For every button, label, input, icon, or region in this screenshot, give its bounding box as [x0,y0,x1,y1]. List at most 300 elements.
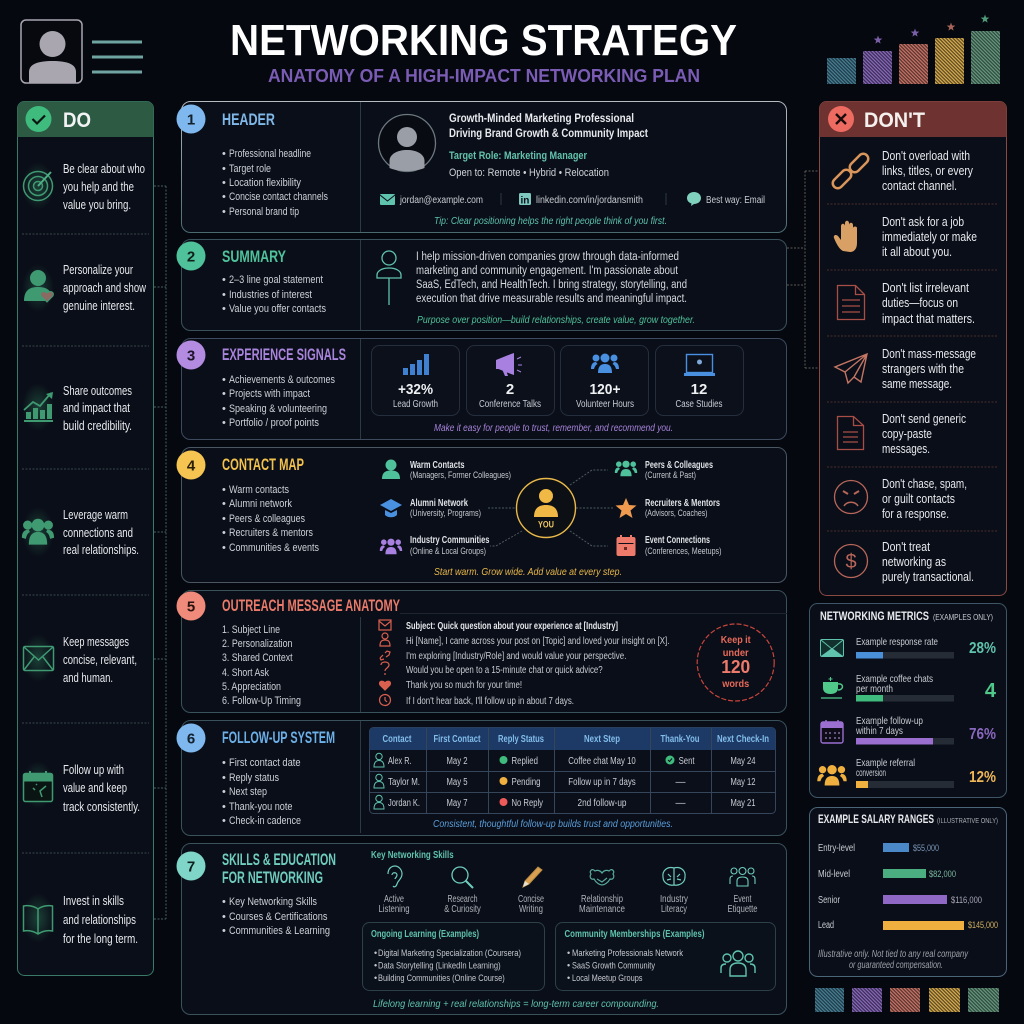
number badge 6: 6 [187,730,195,748]
number badge 5 [176,592,206,620]
summary checklist: • [222,274,226,286]
contact checklist: Recruiters & mentors [229,527,313,539]
panel: 6 follow-up system [176,720,786,836]
table header row [370,728,776,750]
salary bar: mid-level: $82,000 [929,869,956,879]
do item 4: people: Leverage warm [63,508,128,522]
table row: Jordan K.: May 7 [446,798,468,809]
heading: skills and education: SKILLS & EDUCATION [222,850,336,869]
skill: event etiquette: Event [734,894,752,905]
don't item 4: paper plane: strangers with the [882,362,964,376]
table header row: Contact [382,734,412,745]
table header row: Thank-You [660,734,700,745]
icon: person pin [377,251,401,305]
summary checklist: • [222,303,226,315]
key skills title: Key Networking Skills [371,850,454,861]
follow-up checklist: • [222,815,226,827]
stat card: volunteer hours: Volunteer Hours [576,399,634,410]
metric: referral conversion: 12% [969,769,996,786]
contact: alumni network: (University, Programs) [410,508,481,518]
do item 2: person with heart: approach and show [63,281,147,295]
contact: peers and colleagues: (Current & Past) [645,470,696,480]
metric: coffee chats: 4 [985,680,997,702]
outreach checklist: 3. Shared Context [222,652,292,664]
salary bar: lead: $145,000 [968,920,998,930]
heading: skills and education: FOR NETWORKING [222,868,323,887]
experience checklist: Projects with impact [229,388,310,400]
stat card: conference talks: 2 [506,381,514,398]
metric: follow-up: within 7 days [855,725,903,737]
contact: event connections: Event Connections [645,535,710,546]
don't item 4: paper plane: same message. [882,377,952,391]
table row: Taylor M.: May 12 [730,777,756,788]
profile headline: Target Role: Marketing Manager [449,150,588,162]
stat card: conference talks [466,346,554,416]
contact: event connections: (Conferences, Meetups) [645,546,722,556]
do item 5: envelope: Keep messages [63,635,129,649]
table row: Alex R. [374,753,756,767]
skill: active listening: Listening [378,904,410,915]
table header row: Next Step [584,734,620,745]
don't item 1: chain [831,149,974,193]
do item 3: chart [22,383,132,433]
skill: concise writing: Concise [518,894,544,905]
skills checklist: • [222,911,226,923]
summary paragraph: marketing and community engagement. I'm passionate about [416,265,679,277]
experience checklist: Portfolio / proof points [229,417,319,429]
number badge 6 [176,724,206,752]
skill: relationship maintenance [579,870,625,915]
skill: concise writing [518,867,544,915]
follow-up checklist: First contact date [229,757,301,769]
don't item 6: angry face: or guilt contacts [882,492,955,506]
contact: alumni network [380,498,481,518]
contact checklist [222,484,319,554]
heading: header: HEADER [222,110,275,129]
icon: x circle [828,106,854,132]
number badge 3 [176,340,206,370]
box: ongoing learning [362,922,544,990]
you node [516,478,576,538]
message lines: If I don't hear back, I'll follow up in about 7 days. [406,696,574,707]
metric: follow-up [821,715,996,744]
skill: relationship maintenance: Relationship [581,894,623,905]
salary bar: entry-level: Entry-level [818,843,855,854]
don't item 5: document: Don't send generic [882,412,966,426]
table row: Alex R.: Replied [512,756,538,767]
skills checklist [222,896,330,937]
follow-up checklist: • [222,757,226,769]
panel: do [18,102,154,976]
box: community memberships: • [567,948,570,958]
do item 4: people: real relationships. [63,543,139,557]
do item 1: target: Be clear about who [63,162,145,176]
header checklist: • [222,163,226,175]
callout: word limit: Keep it [721,634,751,646]
do item 5: envelope [22,634,137,685]
metric: referral conversion: Example referral [856,757,915,769]
don't heading: DON'T [864,109,925,132]
salary heading: EXAMPLE SALARY RANGES [818,812,934,826]
outreach checklist: 5. Appreciation [222,681,281,693]
callout: word limit [697,624,774,701]
skills checklist: • [222,896,226,908]
don't item 3: document: impact that matters. [882,312,975,326]
don't item 6: angry face [834,477,967,521]
skills tagline: Lifelong learning + real relationships = long-term career compounding. [373,998,659,1010]
don't item 2: hand: it all about you. [882,245,952,259]
salary bar: lead [818,920,998,931]
contact checklist: Alumni network [229,498,292,510]
don't item 3: document [838,281,975,326]
panel: 2 summary [176,240,786,330]
outreach checklist: 4. Short Ask [222,667,269,679]
table row: Taylor M.: Follow up in 7 days [568,777,636,788]
skill: research and curiosity: Research [448,894,478,905]
do item 7: open book: and relationships [63,913,136,927]
don't item 1: chain: links, titles, or every [882,164,974,178]
do item 6: calendar: track consistently. [63,800,140,814]
metric: coffee chats [821,673,997,702]
header checklist: • [222,191,226,203]
do item 6: calendar: Follow up with [63,763,124,777]
follow-up checklist: Thank-you note [229,801,292,813]
skill: concise writing: Writing [519,904,543,915]
table row: Alex R.: May 2 [446,756,468,767]
icon: rising bars with stars [827,14,1000,84]
you node: YOU [538,520,554,530]
contact checklist: • [222,542,226,554]
icon: community group [721,951,755,976]
salary disclaimer: or guaranteed compensation. [849,960,943,971]
header checklist: Target role [229,163,271,175]
subtitle: ANATOMY OF A HIGH-IMPACT NETWORKING PLAN [268,66,700,86]
do item 4: people: connections and [63,526,133,540]
contact: warm contacts: (Managers, Former Colleagues) [410,470,511,480]
salary bar: senior [818,895,982,906]
contact channels: jordan@example.com [399,195,483,206]
don't item 6: angry face: Don't chase, spam, [882,477,967,491]
box: ongoing learning: Building Communities (Online Course) [378,973,505,983]
metric: follow-up: Example follow-up [856,715,923,727]
profile headline: Growth-Minded Marketing Professional [449,113,634,125]
table header row: Next Check-In [717,734,769,745]
table row: Alex R.: May 24 [730,756,756,767]
salary bar: senior: $116,000 [951,895,982,905]
do item 1: target [22,162,145,212]
don't item 7: dollar coin: $ [845,551,857,573]
follow-up table [370,728,776,814]
don't item 2: hand [834,215,977,259]
table row: Jordan K.: 2nd follow-up [578,798,627,809]
table row: Alex R.: Sent [679,756,695,767]
box: community memberships: • [567,973,570,983]
do item 1: target: you help and the [63,180,134,194]
box: ongoing learning: • [374,948,377,958]
contact checklist: • [222,484,226,496]
follow-up checklist: Check-in cadence [229,815,301,827]
do item 1: target: value you bring. [63,198,131,212]
don't item 5: document: copy-paste [882,427,932,441]
skill: industry literacy: Industry [660,894,688,905]
do heading: DO [63,109,91,132]
number badge 4: 4 [187,458,196,474]
follow-up tagline: Consistent, thoughtful follow-up builds trust and opportunities. [433,818,673,830]
do item 2: person with heart: Personalize your [63,263,133,277]
box: community memberships: SaaS Growth Community [572,960,655,970]
summary checklist: 2–3 line goal statement [229,274,323,286]
skill: research and curiosity: & Curiosity [444,904,481,915]
salary bar: senior: Senior [818,895,841,906]
number badge 4 [176,450,206,480]
skills checklist: Courses & Certifications [229,911,328,923]
stat card: case studies: Case Studies [676,399,722,410]
salary bar: entry-level: $55,000 [913,843,939,853]
experience checklist: • [222,374,226,386]
follow-up checklist: • [222,801,226,813]
contact: alumni network: Alumni Network [410,498,468,509]
do item 5: envelope: concise, relevant, [63,653,137,667]
table row: Alex R.: Coffee chat May 10 [568,756,636,767]
callout: word limit: 120 [721,657,750,677]
icon: check circle [26,106,52,132]
do item 5: envelope: and human. [63,671,113,685]
table row: Jordan K.: No Reply [512,798,543,809]
table row: Taylor M.: Pending [512,777,540,788]
callout: word limit: under [723,647,749,659]
do item 3: chart: and impact that [63,401,130,415]
don't item 7: dollar coin: networking as [882,555,946,569]
number badge 1: 1 [187,112,195,128]
follow-up checklist [222,757,301,827]
contact channels [380,192,765,206]
follow-up checklist: • [222,772,226,784]
don't item 3: document: duties—focus on [882,296,958,310]
panel: don't [820,102,1006,596]
box: ongoing learning: Ongoing Learning (Examples) [371,929,479,940]
do item 7: open book: Invest in skills [63,894,124,908]
summary checklist: Value you offer contacts [229,303,326,315]
metric: response rate [820,636,996,658]
stat card: case studies: 12 [691,381,707,398]
skill: research and curiosity [444,867,481,915]
stat card: lead growth: +32% [398,381,433,398]
outreach checklist: 2. Personalization [222,638,292,650]
follow-up checklist: Reply status [229,772,279,784]
do item 6: calendar: value and keep [63,781,127,795]
heading: follow-up system: FOLLOW-UP SYSTEM [222,728,335,747]
skill: event etiquette [728,868,758,915]
summary paragraph: SaaS, EdTech, and HealthTech. I bring strategy, storytelling, and [416,279,687,291]
salary bar: entry-level [818,843,939,854]
stat card: volunteer hours [560,346,648,416]
message lines: Subject: Quick question about your experience at [Industry] [406,621,618,632]
summary checklist: Industries of interest [229,289,312,301]
outreach checklist: 1. Subject Line [222,624,280,636]
callout: word limit: words [721,678,749,690]
connectors: do column to sections [154,186,166,919]
do item 7: open book: for the long term. [63,932,138,946]
contact channels: Best way: Email [706,195,765,206]
skill: active listening: Active [384,894,404,905]
salary disclaimer: Illustrative only. Not tied to any real company [818,949,969,960]
number badge 5: 5 [187,598,195,616]
stat card: volunteer hours: 120+ [590,381,621,398]
contact checklist: • [222,498,226,510]
box: ongoing learning: Data Storytelling (LinkedIn Learning) [378,960,501,970]
contact checklist: Communities & events [229,542,319,554]
don't item 7: dollar coin: purely transactional. [882,570,974,584]
stat card: conference talks: Conference Talks [479,399,541,410]
salary disclaimer [818,949,969,971]
do item 2: person with heart [22,263,147,313]
metrics heading: (EXAMPLES ONLY) [933,613,993,622]
stat card: case studies [656,346,744,416]
number badge 7 [176,852,206,880]
icon: profile card with lines [21,20,143,83]
table row: Taylor M.: Taylor M. [388,777,420,788]
stat card: lead growth [372,346,460,416]
table row: Taylor M. [374,774,756,788]
header checklist: • [222,206,226,218]
message lines [406,621,669,707]
header checklist: • [222,177,226,189]
contact: peers and colleagues [615,460,713,480]
metric: referral conversion [817,757,996,788]
metric: response rate: Example response rate [856,636,938,648]
panel: 1 header [176,102,786,232]
salary heading: (ILLUSTRATIVE ONLY) [937,818,998,825]
icon: avatar [378,114,436,172]
message lines: I'm exploring [Industry/Role] and would value your perspective. [406,651,626,662]
header checklist: Personal brand tip [229,206,299,218]
summary checklist [222,274,326,315]
header tip: Tip: Clear positioning helps the right people think of you first. [434,215,667,227]
don't item 2: hand: Don't ask for a job [882,215,964,229]
contact: recruiters and mentors [616,498,720,518]
box: community memberships: • [567,960,570,970]
don't item 7: dollar coin [834,540,974,584]
panel: 4 contact map [176,448,786,582]
heading: contact map: CONTACT MAP [222,455,304,474]
summary checklist: • [222,289,226,301]
message lines: Would you be open to a 15-minute chat or quick advice? [406,665,603,676]
table header row: First Contact [434,734,481,745]
contact checklist: • [222,527,226,539]
table row: Alex R.: Alex R. [388,756,412,767]
don't item 4: paper plane: Don't mass-message [882,347,976,361]
follow-up checklist: Next step [229,786,267,798]
skills checklist: Key Networking Skills [229,896,317,908]
number badge 2 [176,242,206,270]
profile headline [449,113,648,179]
panel: 3 experience signals [176,338,786,440]
don't item 5: document: messages. [882,442,930,456]
title: NETWORKING STRATEGY [230,16,737,65]
table row: Taylor M.: — [676,777,686,788]
skill: industry literacy: Literacy [661,904,687,915]
box: ongoing learning: • [374,973,377,983]
do item 4: people [22,507,139,557]
box: ongoing learning: • [374,960,377,970]
panel: example salary ranges [810,808,1006,976]
contact: industry communities: Industry Communities [410,535,490,546]
don't item 3: document: Don't list irrelevant [882,281,969,295]
contact: recruiters and mentors: Recruiters & Mentors [645,498,720,509]
experience checklist: Achievements & outcomes [229,374,335,386]
stat card: lead growth: Lead Growth [393,399,438,410]
table row: Jordan K.: — [676,798,686,809]
don't header band [820,102,1006,137]
heading: outreach message anatomy: OUTREACH MESSAGE ANATOMY [222,596,400,615]
follow-up checklist: • [222,786,226,798]
number badge 1 [176,104,206,134]
don't item 1: chain: Don't overload with [882,149,970,163]
experience checklist: • [222,403,226,415]
contact: recruiters and mentors: (Advisors, Coaches) [645,508,708,518]
header checklist: • [222,148,226,160]
heading: skills and education [222,850,336,887]
skills checklist: Communities & Learning [229,925,330,937]
box: community memberships [556,922,776,990]
do item 6: calendar [22,761,140,814]
summary paragraph: execution that drive measurable results and meaningful impact. [416,293,687,305]
table row: Taylor M.: May 5 [446,777,468,788]
metric: response rate: 28% [969,640,996,657]
contact: industry communities [380,535,490,556]
table row: Jordan K.: Jordan K. [388,798,420,809]
do item 2: person with heart: genuine interest. [63,299,135,313]
contact: warm contacts [382,460,511,480]
contact map connectors [488,470,614,546]
header checklist: Concise contact channels [229,191,328,203]
panel: 7 skills and education [176,844,786,1014]
connectors: sections to don't column [787,171,819,368]
decorative hatched swatches [815,988,999,1012]
salary bar: mid-level [818,869,956,880]
box: community memberships: Marketing Professionals Network [572,948,683,958]
contact checklist: Warm contacts [229,484,289,496]
summary tagline: Purpose over position—build relationships, create value, grow together. [417,314,695,326]
experience checklist: • [222,417,226,429]
table row: Jordan K.: May 21 [730,798,756,809]
skill: event etiquette: Etiquette [728,904,758,915]
do item 3: chart: Share outcomes [63,384,132,398]
profile headline: Driving Brand Growth & Community Impact [449,128,648,140]
don't item 4: paper plane [835,347,976,391]
don't item 5: document [838,412,966,456]
metric: coffee chats: per month [856,683,893,695]
skill: relationship maintenance: Maintenance [579,904,625,915]
metric: follow-up: 76% [969,726,996,743]
salary bar: lead: Lead [818,920,834,931]
contact: industry communities: (Online & Local Groups) [410,546,486,556]
header checklist: Location flexibility [229,177,301,189]
don't item 6: angry face: for a response. [882,507,949,521]
profile headline: Open to: Remote • Hybrid • Relocation [449,167,609,179]
header checklist: Professional headline [229,148,311,160]
table header row: Reply Status [498,734,544,745]
contact channels: in [520,196,529,206]
salary bar: mid-level: Mid-level [818,869,850,880]
outreach checklist: 6. Follow-Up Timing [222,695,301,707]
header checklist [222,148,328,218]
panel: 5 outreach message anatomy [176,590,787,712]
do item 3: chart: build credibility. [63,419,132,433]
don't item 1: chain: contact channel. [882,179,957,193]
skills checklist: • [222,925,226,937]
experience checklist: Speaking & volunteering [229,403,327,415]
